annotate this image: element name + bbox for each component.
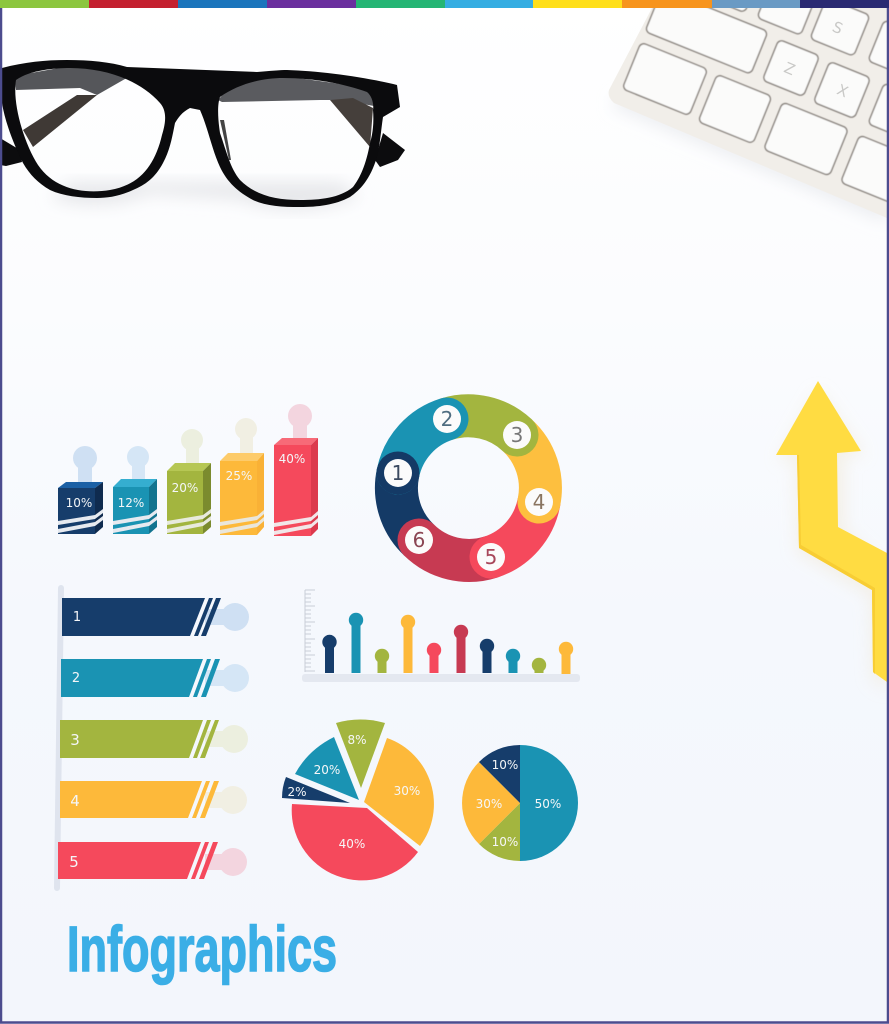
eyeglasses photo	[0, 60, 405, 210]
keyboard keys	[622, 0, 889, 209]
yellow arrow	[776, 381, 889, 690]
title: Infographics	[67, 913, 337, 985]
ring numbers: 6	[413, 528, 425, 552]
pie labels: 20%	[314, 763, 340, 777]
ring numbers: 5	[485, 545, 497, 569]
key letters: Z	[781, 59, 798, 79]
keyboard body	[609, 8, 889, 218]
pie labels	[476, 758, 561, 849]
exploded pie chart	[282, 720, 434, 880]
ring number badges	[384, 405, 553, 571]
bar 5: 40%: 40%	[279, 452, 305, 466]
pie labels: 2%	[287, 785, 307, 799]
ribbon 1: 1	[73, 610, 81, 625]
ring numbers: 2	[441, 407, 453, 431]
key letters: X	[834, 81, 851, 101]
arrow body	[776, 381, 887, 682]
ribbon 2	[61, 659, 249, 697]
slice 30%	[364, 738, 434, 846]
bar 3: 20%: 20%	[172, 481, 198, 495]
bar 4: 25%	[220, 418, 264, 535]
slice 30%	[462, 762, 520, 844]
pie labels: 40%	[339, 837, 365, 851]
pie labels: 30%	[394, 784, 420, 798]
slice 2%	[282, 777, 350, 803]
bar 2: 12%: 12%	[118, 496, 144, 510]
lollipop columns	[322, 613, 573, 674]
slice 50%	[520, 745, 578, 861]
ring numbers	[392, 407, 545, 569]
rainbow top bar	[0, 0, 889, 8]
ribbon 4	[60, 781, 247, 818]
arrow side edge	[797, 455, 875, 674]
slice 10% bottom	[479, 803, 520, 861]
temple tips	[0, 138, 22, 166]
key letters	[781, 18, 851, 101]
arrow shadow	[778, 390, 889, 690]
slice 20%	[295, 737, 359, 800]
vertical axis	[57, 588, 61, 888]
pie labels: 10%	[492, 758, 518, 772]
bar 2: 12%	[113, 446, 157, 534]
key letters: S	[830, 18, 846, 38]
pie labels: 30%	[476, 797, 502, 811]
bar 4: 25%: 25%	[226, 469, 252, 483]
bar 5: 40%	[274, 404, 318, 536]
ribbon 3	[60, 720, 248, 758]
glasses shadow	[50, 182, 360, 210]
pie labels: 8%	[347, 733, 367, 747]
ring numbers: 3	[511, 423, 523, 447]
ribbon 5	[58, 842, 247, 879]
ribbon 2: 2	[72, 671, 80, 686]
ring numbers: 4	[533, 490, 545, 514]
chart baseline	[302, 674, 580, 682]
ribbon 5: 5	[69, 853, 79, 871]
bar 3: 20%	[167, 429, 211, 534]
pie labels: 50%	[535, 797, 561, 811]
3D bar chart	[58, 404, 318, 536]
ribbon 1	[62, 598, 249, 636]
slice 8%	[336, 720, 385, 788]
keyboard photo	[609, 0, 889, 222]
ring numbers: 1	[392, 461, 404, 485]
pie labels: 10%	[492, 835, 518, 849]
bar 1: 10%	[58, 446, 103, 534]
lens reflections and temple arms	[14, 66, 374, 160]
chart scale ticks	[305, 590, 315, 672]
donut process ring	[376, 405, 553, 571]
pie labels	[287, 733, 420, 851]
slice 40%	[292, 804, 418, 880]
horizontal ribbon bars	[57, 588, 249, 888]
glasses frame	[2, 60, 400, 207]
bar 1: 10%: 10%	[66, 496, 92, 510]
ribbon 4: 4	[70, 792, 80, 810]
lollipop column chart	[302, 590, 580, 682]
ribbon 3: 3	[70, 731, 80, 749]
solid pie chart	[462, 745, 578, 861]
slice 10% top	[479, 745, 520, 803]
